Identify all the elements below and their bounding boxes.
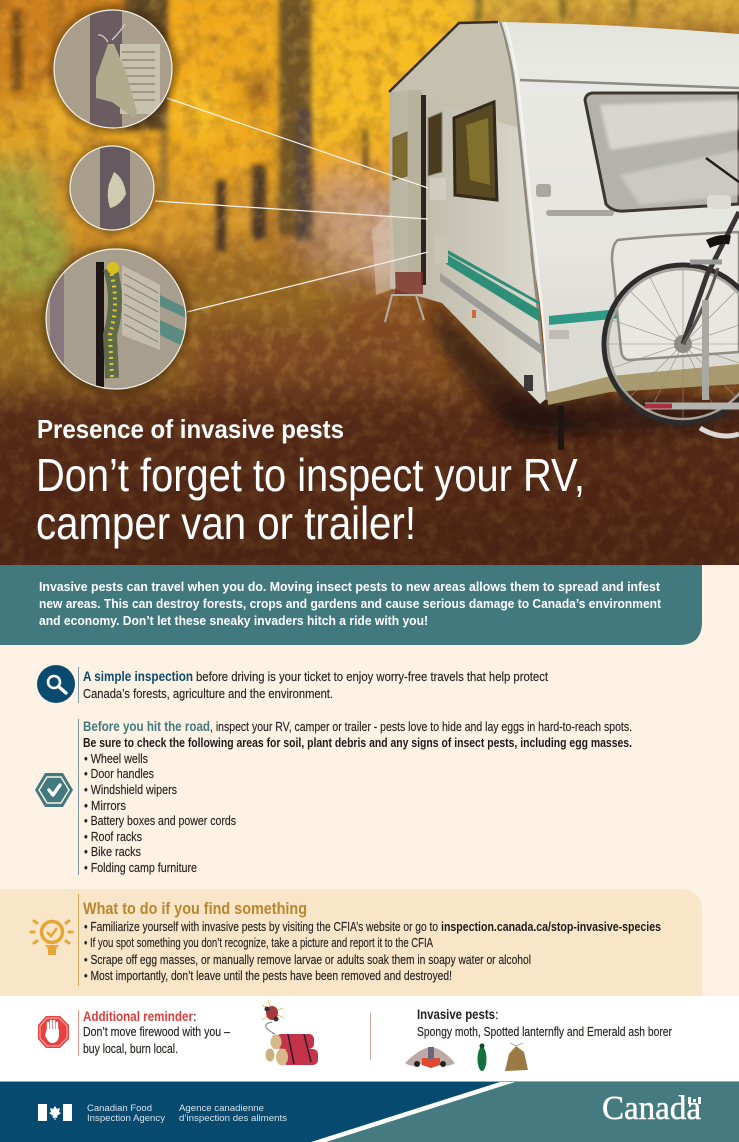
- small lights: [549, 330, 569, 339]
- tan skirt: [547, 364, 739, 405]
- icon: emerald ash borer: [478, 1044, 486, 1071]
- side wall: [389, 22, 547, 404]
- text block: before you hit the road: , inspect your RV, camper or trailer - pests love to hide and lay eggs in hard-to-reach spots.: [210, 719, 632, 734]
- agency names: [87, 1103, 287, 1124]
- icon: firewood bomb with moth: [262, 1000, 318, 1066]
- action list: • Familiarize yourself with invasive pests by visiting the CFIA’s website or go to: [84, 919, 438, 934]
- icon: check hexagon: [35, 773, 73, 807]
- forest background: [0, 0, 739, 585]
- text block: simple inspection: Canada’s forests, agriculture and the environment.: [83, 686, 333, 701]
- door: [408, 90, 422, 280]
- text block: additional reminder: :: [193, 1009, 197, 1024]
- action list: inspection.canada.ca/stop-invasive-species: [441, 919, 661, 934]
- icon: light bulb: [31, 921, 72, 955]
- action list: • Scrape off egg masses, or manually remove larvae or adults soak them in soapy water or alcohol: [84, 952, 531, 967]
- roof rail: [520, 80, 739, 88]
- text block: invasive pests: [417, 1007, 673, 1039]
- text block: invasive pests: Invasive pests: [417, 1007, 495, 1022]
- callout lines: [155, 98, 428, 312]
- hero heading: camper van or trailer!: [36, 497, 416, 549]
- trailer: [372, 22, 739, 450]
- text block: invasive pests: Spongy moth, Spotted lanternfly and Emerald ash borer: [417, 1024, 673, 1039]
- action list: [84, 919, 661, 983]
- panel: white reminder band: [0, 996, 739, 1082]
- hero heading: [36, 414, 585, 549]
- side stripes: [446, 249, 540, 305]
- footer band: [0, 1081, 739, 1142]
- shadow: [430, 300, 610, 440]
- callout circle: adult moth: [49, 5, 180, 135]
- icon: spotted lanternfly: [405, 1047, 455, 1068]
- agency names: d’inspection des aliments: [179, 1113, 287, 1124]
- tree trunks: [12, 0, 636, 252]
- checklist: • Mirrors: [84, 798, 126, 813]
- logo: Canada flag: [38, 1104, 72, 1121]
- Canada wordmark: Canada: [602, 1090, 701, 1127]
- agency names: Agence canadienne: [179, 1103, 264, 1114]
- rear windows: [393, 132, 407, 180]
- checklist: • Wheel wells: [84, 751, 148, 766]
- hero heading: Presence of invasive pests: [37, 414, 344, 444]
- front wall: [498, 22, 739, 398]
- checklist: [84, 751, 236, 875]
- bicycle on rack: [604, 158, 739, 436]
- checklist: • Battery boxes and power cords: [84, 813, 236, 828]
- callout circle: caterpillar: [41, 244, 191, 394]
- icon: magnifying glass: [37, 665, 75, 703]
- agency names: Canadian Food: [87, 1103, 152, 1114]
- text block: additional reminder: Don’t move firewood with you –: [83, 1024, 231, 1039]
- front edge trim: [500, 22, 547, 400]
- action list: • Most importantly, don’t leave until the pests have been removed and destroyed!: [84, 968, 452, 983]
- checklist: • Door handles: [84, 766, 154, 781]
- text block: before you hit the road: Before you hit the road: [83, 719, 210, 734]
- text block: invasive pests: :: [495, 1007, 499, 1022]
- intro banner: new areas. This can destroy forests, crops and gardens and cause serious damage to Canada’s environment: [39, 596, 662, 611]
- text block: additional reminder: buy local, burn local.: [83, 1041, 178, 1056]
- panel: what to do if you find something: [0, 889, 702, 996]
- intro banner: [0, 565, 702, 645]
- text block: simple inspection: [83, 669, 548, 701]
- callout circle: egg mass: [66, 142, 160, 234]
- service hatch: [612, 232, 739, 360]
- checklist: • Folding camp furniture: [84, 860, 197, 875]
- hero heading: Don’t forget to inspect your RV,: [36, 449, 585, 501]
- text block: simple inspection: A simple inspection: [83, 669, 193, 684]
- agency names: Inspection Agency: [87, 1113, 165, 1124]
- jack: [558, 406, 564, 450]
- intro banner: and economy. Don’t let these sneaky invaders hitch a ride with you!: [39, 613, 428, 628]
- text block: simple inspection: before driving is your ticket to enjoy worry-free travels that help protect: [196, 669, 548, 684]
- checklist: • Windshield wipers: [84, 782, 177, 797]
- folding chair: [385, 295, 424, 322]
- checklist: • Roof racks: [84, 829, 142, 844]
- vents: [430, 178, 446, 200]
- text block: additional reminder: [83, 1009, 231, 1056]
- icon: stop hand: [38, 1016, 69, 1048]
- heading: What to do if you find something: [83, 900, 307, 918]
- green front stripe: [549, 309, 617, 325]
- handles: [536, 184, 551, 197]
- text block: additional reminder: Additional reminder: [83, 1009, 194, 1024]
- action list: • If you spot something you don’t recognize, take a picture and report it to the CFIA: [84, 935, 433, 950]
- large window: [585, 93, 739, 211]
- checklist: • Bike racks: [84, 844, 141, 859]
- intro banner: Invasive pests can travel when you do. Moving insect pests to new areas allows them to spread and infest: [39, 579, 661, 594]
- hero photo: autumn forest with trailer: [0, 0, 739, 585]
- text block: before you hit the road: [83, 719, 632, 875]
- icon: spongy moth: [505, 1043, 528, 1071]
